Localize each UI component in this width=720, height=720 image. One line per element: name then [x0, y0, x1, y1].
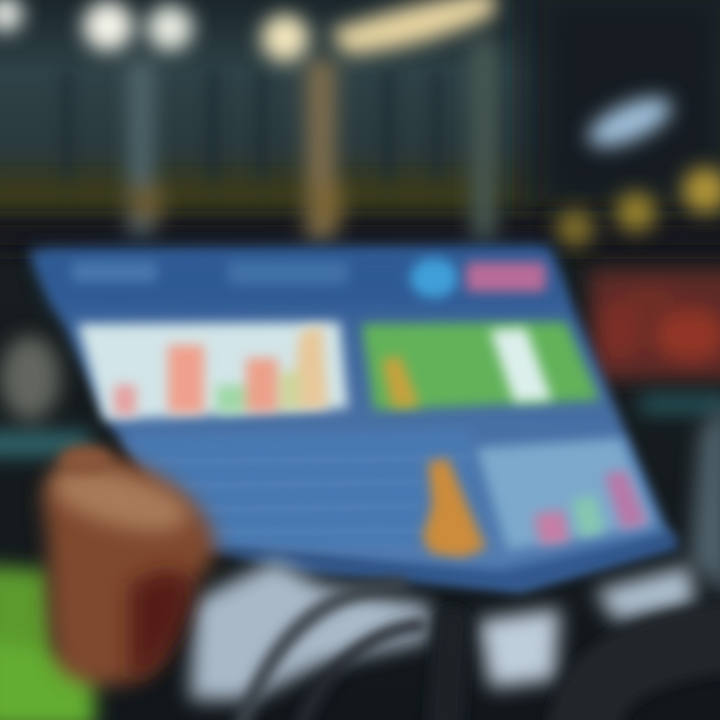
table panel — [125, 430, 480, 545]
floodlight towers — [128, 40, 496, 240]
left side details — [0, 336, 720, 456]
floodlights — [0, 0, 678, 157]
viewer hand — [42, 446, 216, 685]
tablet dashboard — [30, 248, 680, 592]
grass pitch — [0, 565, 95, 720]
header label middle — [228, 262, 348, 284]
tablet body — [30, 248, 672, 588]
viewer sleeve and cushions — [190, 560, 695, 700]
header bar — [34, 250, 562, 310]
crowd: red seating — [590, 270, 720, 380]
header label left — [72, 262, 157, 282]
chart panel: green pitch map — [362, 322, 600, 410]
orange callout shape — [422, 458, 486, 558]
chart panel: bars — [78, 322, 348, 420]
header button blue — [410, 258, 458, 298]
header button pink — [466, 262, 546, 292]
dark armrest curves — [240, 585, 720, 720]
right dark edge of device frame — [690, 400, 720, 600]
tablet lower edge — [190, 532, 680, 592]
mini chart panel — [476, 438, 654, 550]
amber lights, right stands — [556, 167, 720, 247]
